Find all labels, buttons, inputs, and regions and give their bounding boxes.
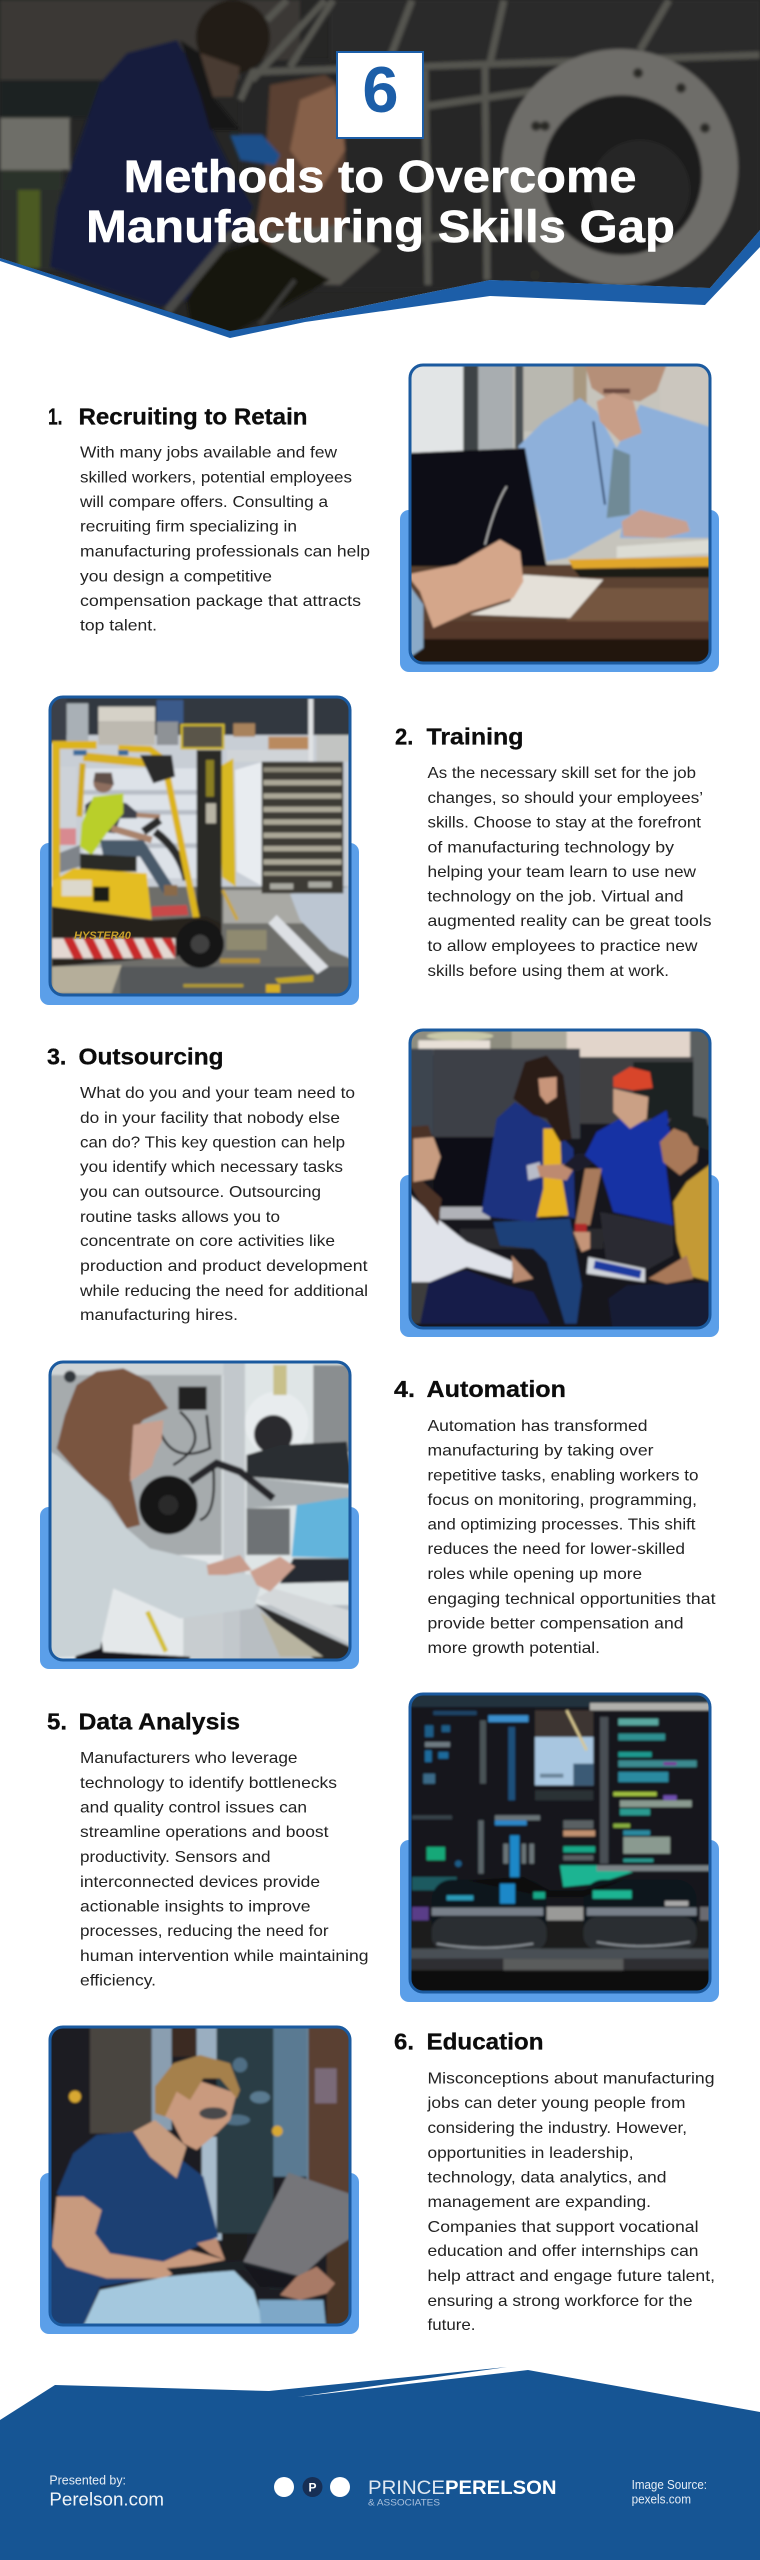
text block: 1: will compare offers. Consulting a bbox=[79, 494, 328, 511]
text block: 2: helping your team learn to use new bbox=[428, 864, 696, 881]
text block: 3: What do you and your team need to bbox=[80, 1085, 355, 1102]
text block: 5: actionable insights to improve bbox=[80, 1898, 311, 1916]
text block: 1 bbox=[79, 444, 370, 634]
text block: 4: roles while opening up more bbox=[428, 1566, 642, 1583]
panel: 4 automation bbox=[394, 1376, 716, 1657]
heading: 3: Outsourcing bbox=[78, 1044, 224, 1070]
text block: 3 bbox=[79, 1085, 368, 1324]
text block: 4: manufacturing by taking over bbox=[428, 1443, 654, 1460]
photo: team in office bbox=[400, 1022, 720, 1342]
header blue ribbon bbox=[0, 230, 760, 338]
text block: 5: interconnected devices provide bbox=[80, 1874, 320, 1891]
text block: 1: recruiting firm specializing in bbox=[80, 519, 297, 536]
text block: 6: jobs can deter young people from bbox=[426, 2095, 686, 2112]
text block: 1: With many jobs available and few bbox=[80, 444, 337, 462]
text block: 6: ensuring a strong workforce for the bbox=[428, 2293, 693, 2310]
text block: 5: Manufacturers who leverage bbox=[80, 1750, 298, 1767]
text block: 3: concentrate on core activities like bbox=[80, 1233, 335, 1250]
text block: 6 bbox=[426, 2071, 715, 2334]
image source bbox=[632, 2478, 707, 2506]
title bbox=[86, 151, 675, 252]
text block: 6: management are expanding. bbox=[428, 2194, 651, 2211]
text block: 2: As the necessary skill set for the job bbox=[428, 765, 696, 782]
text block: 5: processes, reducing the need for bbox=[80, 1923, 329, 1940]
text block: 2: augmented reality can be great tools bbox=[428, 913, 712, 930]
title: Methods to Overcome bbox=[124, 151, 637, 202]
text block: 2: of manufacturing technology by bbox=[428, 839, 674, 856]
panel: 3 outsourcing bbox=[47, 1044, 368, 1324]
heading: 5: Data Analysis bbox=[78, 1708, 240, 1734]
text block: 6: Companies that support vocational bbox=[428, 2219, 698, 2236]
heading: 6: Education bbox=[426, 2028, 544, 2054]
badge: number 6 bbox=[337, 52, 423, 138]
heading: 2: Training bbox=[426, 724, 524, 750]
presented by bbox=[49, 2474, 164, 2510]
heading: 4: Automation bbox=[426, 1376, 566, 1402]
text block: 6: education and offer internships can bbox=[428, 2243, 698, 2260]
text block: 1: manufacturing professionals can help bbox=[80, 543, 370, 560]
text block: 2: to allow employees to practice new bbox=[428, 938, 698, 955]
text block: 5: efficiency. bbox=[80, 1973, 156, 1990]
text block: 2: skills. Choose to stay at the forefront bbox=[428, 815, 702, 832]
text block: 2: changes, so should your employees’ bbox=[428, 790, 703, 807]
logo: prince perelson: & ASSOCIATES bbox=[368, 2498, 440, 2508]
text block: 4: reduces the need for lower-skilled bbox=[428, 1541, 685, 1558]
text block: 6: technology, data analytics, and bbox=[428, 2170, 666, 2186]
text block: 4: more growth potential. bbox=[428, 1640, 600, 1657]
text block: 6: Misconceptions about manufacturing bbox=[428, 2071, 714, 2088]
forklift brand lettering: HYSTER40 bbox=[74, 930, 132, 942]
panel: 2 training bbox=[395, 724, 712, 980]
text block: 5: technology to identify bottlenecks bbox=[80, 1775, 337, 1792]
text block: 1: you design a competitive bbox=[80, 568, 272, 585]
text block: 5: productivity. Sensors and bbox=[80, 1849, 270, 1866]
photo: code on monitor with glasses bbox=[400, 1687, 720, 2007]
text block: 5 bbox=[80, 1750, 368, 1990]
logo: prince perelson bbox=[274, 2477, 556, 2508]
text block: 5: streamline operations and boost bbox=[80, 1824, 329, 1841]
text block: 4: repetitive tasks, enabling workers to bbox=[428, 1467, 699, 1484]
logo: prince perelson: PRINCE bbox=[368, 2478, 445, 2499]
text block: 4 bbox=[428, 1418, 716, 1657]
heading: 4: 4. bbox=[394, 1376, 415, 1402]
text block: 1: top talent. bbox=[80, 618, 157, 634]
photo: student with laptop bbox=[40, 2020, 360, 2340]
heading: 5: 5. bbox=[47, 1708, 67, 1734]
presented by: Presented by: bbox=[49, 2474, 126, 2488]
panel: 1 recruiting to retain bbox=[48, 404, 370, 634]
text block: 5: and quality control issues can bbox=[80, 1800, 307, 1817]
photo: business meeting bbox=[400, 358, 720, 678]
text block: 2: technology on the job. Virtual and bbox=[428, 889, 684, 906]
text block: 3: while reducing the need for additional bbox=[79, 1283, 368, 1300]
text block: 3: you identify which necessary tasks bbox=[80, 1159, 343, 1176]
heading: 1: 1. bbox=[48, 404, 62, 430]
panel: 6 education bbox=[394, 2028, 715, 2334]
image source: Image Source: bbox=[632, 2478, 707, 2492]
badge: number 6: 6 bbox=[362, 53, 399, 126]
text block: 1: compensation package that attracts bbox=[80, 593, 361, 610]
text block: 4: focus on monitoring, programming, bbox=[428, 1492, 697, 1509]
panel: footer bbox=[0, 2367, 760, 2560]
text block: 6: help attract and engage future talent, bbox=[428, 2268, 715, 2285]
logo: prince perelson: PERELSON bbox=[445, 2478, 556, 2499]
title: Manufacturing Skills Gap bbox=[86, 201, 675, 252]
heading: 3: 3. bbox=[47, 1044, 66, 1070]
text block: 2: skills before using them at work. bbox=[428, 963, 669, 980]
heading: 1: Recruiting to Retain bbox=[78, 404, 308, 430]
heading: 2: 2. bbox=[395, 724, 413, 750]
text block: 3: routine tasks allows you to bbox=[80, 1209, 280, 1226]
text block: 3: you can outsource. Outsourcing bbox=[80, 1184, 321, 1201]
text block: 5: human intervention while maintaining bbox=[80, 1948, 368, 1965]
text block: 1: skilled workers, potential employees bbox=[80, 469, 352, 486]
text block: 4: engaging technical opportunities that bbox=[428, 1591, 716, 1608]
text block: 3: production and product development bbox=[80, 1258, 368, 1275]
photo: forklift in warehouse bbox=[40, 690, 360, 1010]
image source: pexels.com bbox=[632, 2492, 691, 2506]
text block: 4: Automation has transformed bbox=[428, 1418, 648, 1435]
presented by: Perelson.com bbox=[49, 2490, 164, 2510]
logo: prince perelson: P bbox=[308, 2480, 317, 2494]
text block: 3: manufacturing hires. bbox=[80, 1307, 238, 1324]
text block: 6: future. bbox=[428, 2317, 476, 2334]
panel: header photo background bbox=[0, 0, 760, 340]
panel: 5 data analysis bbox=[47, 1708, 368, 1990]
text block: 6: opportunities in leadership, bbox=[428, 2145, 634, 2162]
text block: 6: considering the industry. However, bbox=[428, 2120, 687, 2137]
text block: 3: can do? This key question can help bbox=[80, 1134, 345, 1151]
text block: 2 bbox=[428, 765, 712, 980]
text block: 3: do in your facility that nobody else bbox=[80, 1110, 340, 1127]
heading: 6: 6. bbox=[394, 2028, 414, 2054]
text block: 4: provide better compensation and bbox=[428, 1616, 684, 1633]
photo: engineer at laptop bbox=[40, 1355, 360, 1675]
text block: 4: and optimizing processes. This shift bbox=[428, 1517, 696, 1534]
